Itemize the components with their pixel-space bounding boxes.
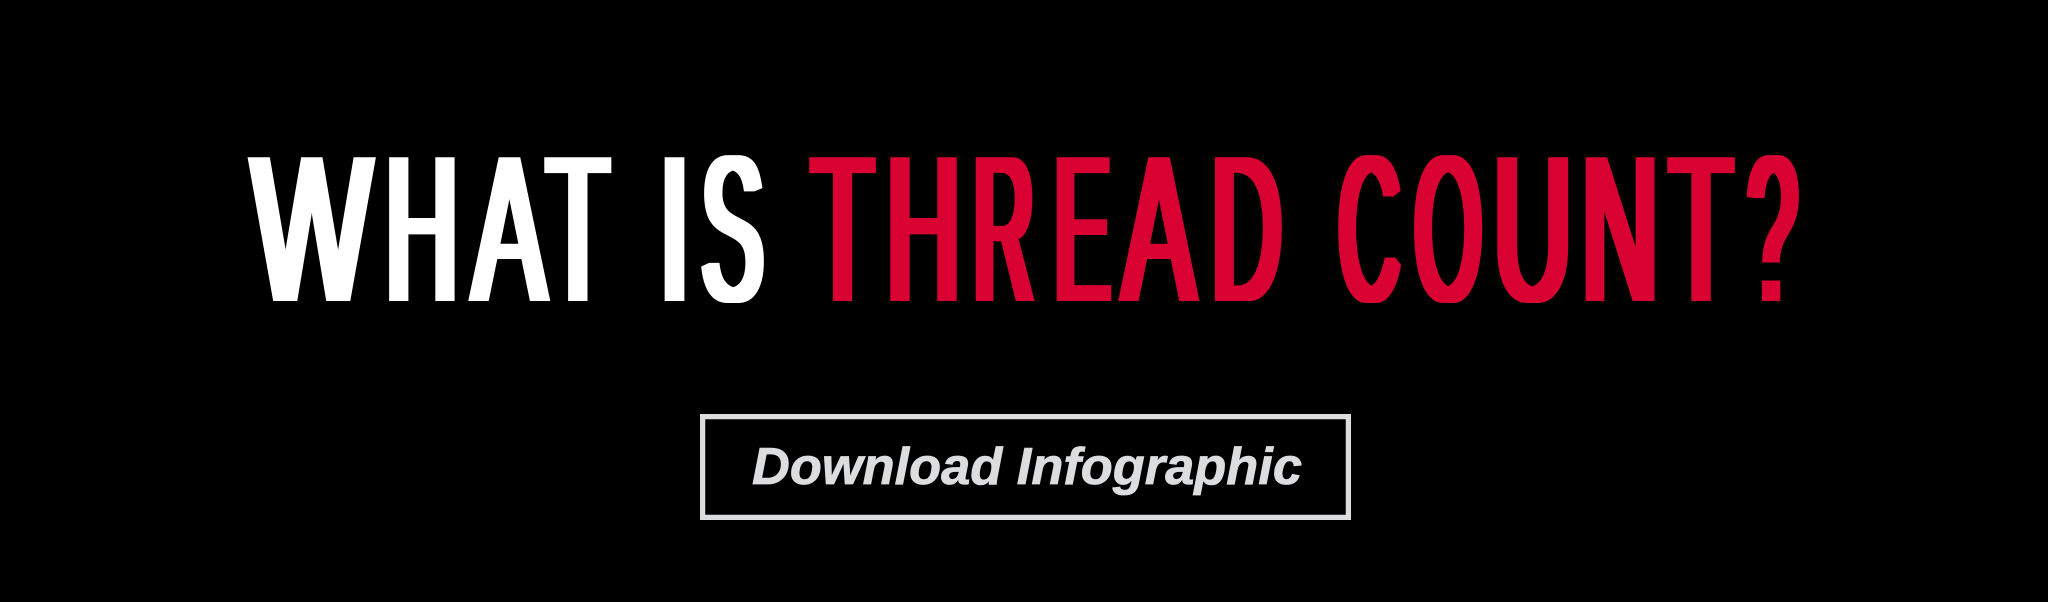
title: ? xyxy=(1748,113,1797,346)
title: T xyxy=(812,113,873,346)
title: T xyxy=(547,113,609,346)
title: A xyxy=(473,113,546,346)
title: A xyxy=(1123,113,1195,346)
title: N xyxy=(1582,113,1658,346)
title: D xyxy=(1212,113,1282,346)
title: R xyxy=(974,113,1033,346)
download button xyxy=(700,414,1351,520)
title: T xyxy=(1670,113,1732,346)
title: U xyxy=(1494,113,1571,346)
title: E xyxy=(1054,113,1109,346)
title xyxy=(248,113,1799,346)
title: O xyxy=(1415,113,1481,346)
button label: Download Infographic xyxy=(752,438,1302,496)
title: I xyxy=(660,113,689,346)
button outline xyxy=(702,416,1348,518)
title: S xyxy=(702,113,763,346)
title: C xyxy=(1339,113,1399,346)
title: H xyxy=(386,113,458,346)
title: W xyxy=(252,113,371,346)
title: H xyxy=(887,113,960,346)
